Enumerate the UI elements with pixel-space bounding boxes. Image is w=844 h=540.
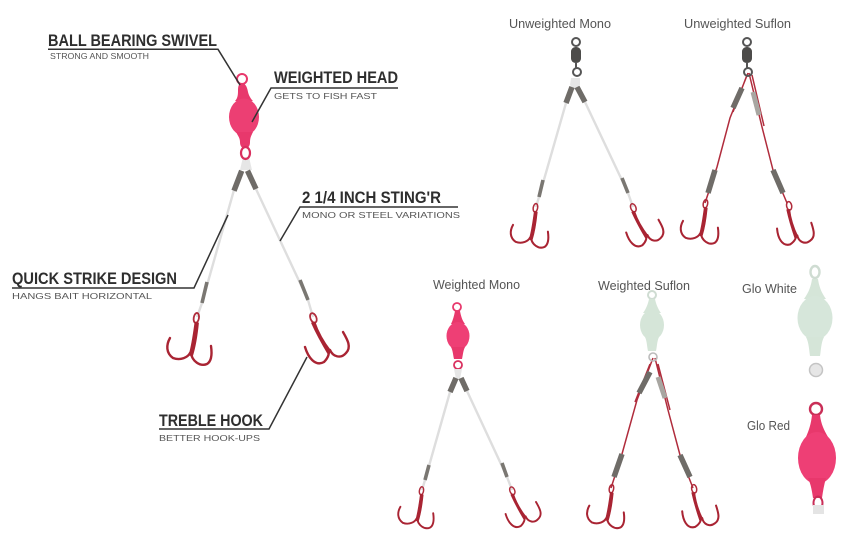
main rig weighted head <box>229 74 259 159</box>
variant: weighted mono rig <box>398 303 541 528</box>
callout: quick strike design: HANGS BAIT HORIZONTAL <box>12 291 152 301</box>
callout: sting'r length: MONO OR STEEL VARIATIONS <box>302 210 460 220</box>
callout: weighted head: WEIGHTED HEAD <box>274 69 398 87</box>
callout: treble hook: TREBLE HOOK <box>159 412 263 430</box>
caption: unweighted suflon: Unweighted Suflon <box>684 17 791 31</box>
variant: glo red head <box>798 403 836 514</box>
caption: glo white: Glo White <box>742 282 797 296</box>
callout: weighted head: GETS TO FISH FAST <box>274 91 377 101</box>
callout: quick strike design: QUICK STRIKE DESIGN <box>12 270 177 288</box>
variant: glo white head <box>798 266 832 376</box>
caption: glo red: Glo Red <box>747 419 790 433</box>
callout: sting'r length <box>280 189 460 241</box>
caption: weighted mono: Weighted Mono <box>433 278 520 292</box>
callout: treble hook: BETTER HOOK-UPS <box>159 433 260 443</box>
callout: sting'r length: 2 1/4 INCH STING'R <box>302 189 441 207</box>
caption: unweighted mono: Unweighted Mono <box>509 17 611 31</box>
variant: weighted suflon rig <box>587 291 724 532</box>
callout: ball bearing swivel: BALL BEARING SWIVEL <box>48 32 217 50</box>
callout: quick strike design <box>12 215 228 301</box>
main rig: weighted mono sting'r <box>167 74 349 365</box>
caption: weighted suflon: Weighted Suflon <box>598 279 690 293</box>
callout: ball bearing swivel <box>48 32 240 85</box>
main rig wires <box>197 157 313 317</box>
variant: unweighted suflon rig <box>681 38 820 250</box>
callout: treble hook <box>159 357 307 443</box>
variant: unweighted mono rig <box>511 38 663 248</box>
callout: weighted head <box>252 69 398 122</box>
main rig sleeves <box>202 171 308 303</box>
main rig left treble hook <box>167 313 212 365</box>
callout: ball bearing swivel: STRONG AND SMOOTH <box>50 51 149 61</box>
main rig right treble hook <box>305 312 349 363</box>
